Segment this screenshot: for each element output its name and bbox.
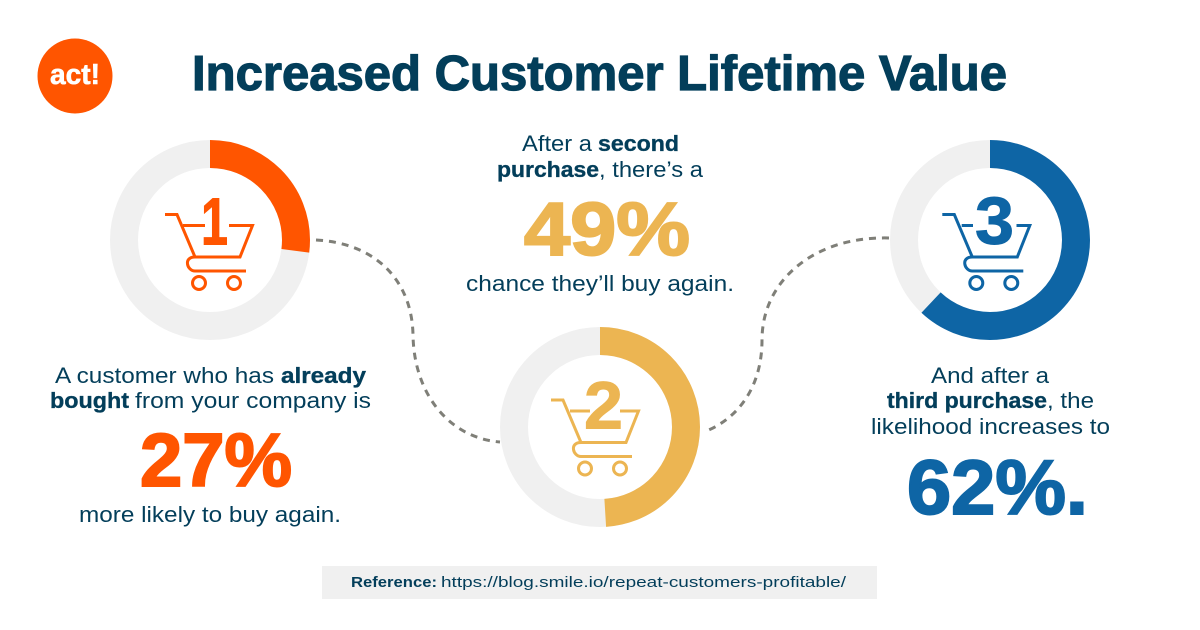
icon: cart 3: [942, 214, 1030, 290]
number 1: 1: [201, 184, 228, 260]
text block: step 2: purchase: [497, 157, 599, 182]
panel: step 2 donut: [514, 341, 686, 513]
text block: step 3: , the: [1047, 388, 1094, 413]
panel: step 3 donut: [904, 154, 1076, 326]
text block: step 3: third purchase: [887, 388, 1047, 413]
reference bar: https://blog.smile.io/repeat-customers-profitable/: [441, 574, 847, 591]
text block: step 1: more likely to buy again.: [79, 502, 341, 527]
stat: 62%: 62%.: [907, 445, 1088, 531]
title: Increased Customer Lifetime Value: [192, 47, 1007, 101]
reference bar: Reference:: [351, 574, 437, 591]
panel: step 1 donut: [124, 154, 296, 326]
connector: step 1 to step 2: [316, 240, 500, 442]
number 2: 2: [584, 368, 623, 444]
text block: step 3: likelihood increases to: [871, 414, 1110, 439]
number 3: 3: [975, 184, 1014, 259]
connector: step 2 to step 3: [704, 238, 889, 432]
text block: step 3: And after a: [931, 363, 1050, 388]
text block: step 2: chance they’ll buy again.: [466, 271, 734, 296]
text block: step 1: from your company is: [135, 388, 371, 413]
stat: 49%: 49%: [524, 187, 690, 271]
text block: step 1: [50, 363, 371, 527]
logo: act!: [38, 38, 112, 114]
icon: cart 1: [165, 214, 252, 290]
stat: 27%: 27%: [140, 418, 292, 502]
text block: step 2: , there’s a: [599, 157, 704, 182]
logo: act!: act!: [50, 59, 100, 91]
icon: cart 2: [551, 400, 638, 475]
text block: step 3: [871, 363, 1110, 531]
text block: step 1: bought: [50, 388, 130, 413]
text block: step 2: [466, 131, 734, 296]
text block: step 1: already: [281, 363, 367, 388]
text block: step 2: After a: [522, 131, 593, 156]
reference bar: [322, 566, 877, 599]
text block: step 1: A customer who has: [55, 363, 274, 388]
text block: step 2: second: [598, 131, 679, 156]
